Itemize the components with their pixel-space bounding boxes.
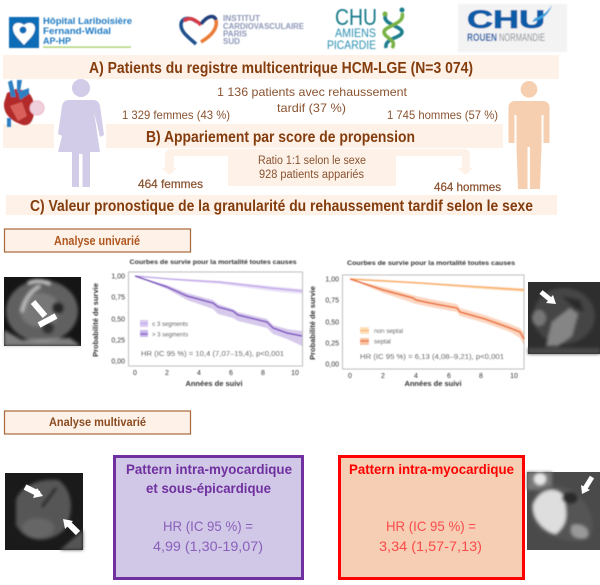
axes labels <box>111 274 299 377</box>
label: Analyse univarié <box>4 229 190 252</box>
axes labels: 0,25 <box>325 340 339 348</box>
plot frame <box>128 272 302 366</box>
confidence bands <box>135 276 302 346</box>
panel: red pattern result: HR (IC 95 %) = <box>386 518 476 534</box>
logo: Hôpital Lariboisière: Hôpital Lariboisière <box>43 16 132 27</box>
survival chart 2: Probabilité de survie <box>308 286 317 360</box>
logo: CHU Rouen Normandie: ROUEN <box>467 32 497 44</box>
survival chart 1: Années de suivi <box>185 379 243 388</box>
axes labels: 8 <box>479 373 483 380</box>
panel: red pattern result: Pattern intra-myocardique <box>349 461 514 477</box>
band B <box>3 124 503 148</box>
MRI image 3 <box>5 473 83 550</box>
legend <box>360 327 403 346</box>
axes labels: 10 <box>510 373 518 380</box>
text: men count: 1 745 hommes (57 %) <box>387 108 498 122</box>
confidence bands <box>350 279 524 345</box>
axes labels <box>325 276 518 380</box>
axes labels: 4 <box>414 373 418 380</box>
heading B: B) Appariement par score de propension <box>146 129 415 146</box>
panel: red pattern result: 3,34 (1,57-7,13) <box>379 538 482 554</box>
plot frame <box>342 275 524 369</box>
axes labels: 0,00 <box>111 358 125 366</box>
chart title: Courbes de survie pour la mortalité toutes causes <box>347 260 515 267</box>
text: patients with late enhancement: 1 136 patients avec rehaussement <box>217 85 408 99</box>
logo: Institut Cardiovasculaire Paris Sud: PARIS <box>223 30 248 38</box>
axes labels: 2 <box>381 373 385 380</box>
logo: Institut Cardiovasculaire Paris Sud: CARDIOVASCULAIRE <box>223 22 305 31</box>
logo: CHU Amiens Picardie: AMIENS <box>335 26 376 40</box>
text: patients with late enhancement <box>217 85 408 115</box>
chart title: Courbes de survie pour la mortalité toutes causes <box>130 259 297 266</box>
axes labels: 0,25 <box>111 338 125 344</box>
logo: CHU Rouen Normandie: CHU <box>467 6 545 34</box>
MRI image 2 <box>528 282 600 354</box>
survival chart 2: Années de suivi <box>404 379 462 388</box>
label: Analyse multivarié: Analyse multivarié <box>49 417 146 429</box>
band C <box>6 195 557 215</box>
icon: woman figure <box>58 79 104 187</box>
text: 464 men: 464 hommes <box>434 180 501 194</box>
logo: Hôpital Lariboisière: AP-HP <box>43 36 72 47</box>
hazard ratio: HR (IC 95 %) = 10,4 (7,07–15,4), p<0,001 <box>141 351 284 358</box>
axes labels: 0,75 <box>111 294 125 302</box>
ratio box with split arrows: 928 patients appariés <box>259 169 364 181</box>
axes labels: 0,50 <box>111 316 125 324</box>
logo: CHU Rouen Normandie <box>458 4 567 52</box>
band A <box>3 55 559 79</box>
axes labels: 2 <box>165 370 169 377</box>
panel: purple pattern result: Pattern intra-myocardique <box>126 461 292 477</box>
axes labels: 6 <box>229 370 233 377</box>
legend <box>140 320 188 338</box>
axes labels: 0,00 <box>325 362 339 368</box>
axes labels: 10 <box>291 370 299 377</box>
panel: purple pattern result: HR (IC 95 %) = <box>163 518 253 534</box>
icon: heart illustration <box>4 80 44 127</box>
logo: CHU Rouen Normandie: NORMANDIE <box>499 32 545 44</box>
logo: Institut Cardiovasculaire Paris Sud <box>181 14 305 46</box>
axes labels: 8 <box>261 370 265 377</box>
axes labels: 6 <box>447 373 451 380</box>
logo: Institut Cardiovasculaire Paris Sud: INSTITUT <box>223 14 260 23</box>
heading C: C) Valeur pronostique de la granularité du rehaussement tardif selon le sexe <box>30 198 533 215</box>
ratio box with split arrows: Ratio 1:1 selon le sexe <box>258 155 366 167</box>
legend: > 3 segments <box>152 332 188 338</box>
legend: non septal <box>374 328 403 335</box>
MRI image 4 <box>527 472 600 550</box>
ratio box with split arrows <box>162 149 473 186</box>
legend: septal <box>374 338 391 346</box>
logo: Hôpital Lariboisière <box>9 16 132 48</box>
axes labels: 0,75 <box>325 298 339 304</box>
logo: CHU Amiens Picardie: PICARDIE <box>327 38 376 52</box>
panel: purple pattern result <box>114 456 302 578</box>
survival chart 1 <box>91 259 302 388</box>
text: patients with late enhancement: tardif (37 %) <box>277 101 346 115</box>
axes labels: 0 <box>348 373 352 380</box>
axes labels: 0 <box>133 370 137 377</box>
logo: Institut Cardiovasculaire Paris Sud: SUD <box>223 37 240 46</box>
logo: Hôpital Lariboisière: Fernand-Widal <box>43 26 111 37</box>
text: women count: 1 329 femmes (43 %) <box>122 108 230 122</box>
logo: CHU Amiens Picardie: CHU <box>335 4 377 30</box>
label: Analyse univarié: Analyse univarié <box>54 234 140 248</box>
label: Analyse multivarié <box>4 411 190 434</box>
legend: ≤ 3 segments <box>152 322 188 328</box>
panel: purple pattern result: 4,99 (1,30-19,07) <box>153 538 263 554</box>
survival curves <box>135 276 302 291</box>
hazard ratio: HR (IC 95 %) = 6,13 (4,08–9,21), p<0,001 <box>360 354 504 361</box>
logo: CHU Amiens Picardie <box>327 4 404 52</box>
text: 464 women: 464 femmes <box>138 177 203 191</box>
survival chart 2 <box>308 260 524 388</box>
axes labels: 1,00 <box>111 274 125 280</box>
heading A: A) Patients du registre multicentrique HCM-LGE (N=3 074) <box>89 60 473 77</box>
panel: purple pattern result: et sous-épicardique <box>146 480 271 496</box>
axes labels: 4 <box>197 370 201 377</box>
survival curves <box>350 279 524 290</box>
panel: red pattern result <box>340 456 524 578</box>
axes labels: 0,50 <box>325 320 339 326</box>
axes labels: 1,00 <box>325 276 339 284</box>
icon: man figure <box>508 81 550 189</box>
MRI image 1 <box>4 277 81 346</box>
survival chart 1: Probabilité de survie <box>91 283 100 357</box>
